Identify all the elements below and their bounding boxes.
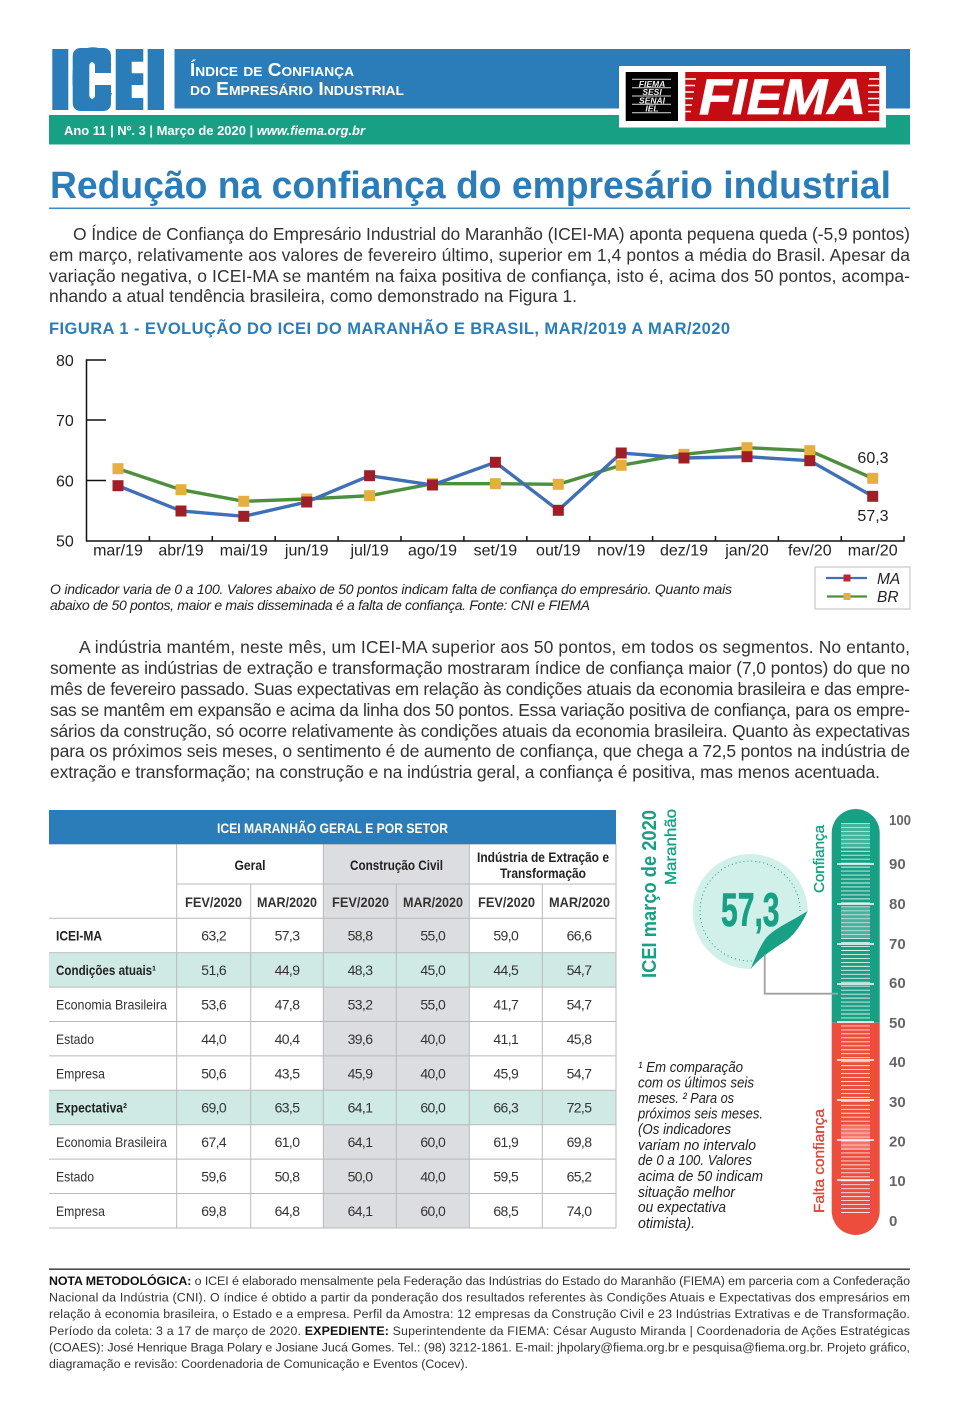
row: ICEI-MA	[56, 928, 592, 944]
logo: ICEI wordmark: I	[141, 30, 169, 129]
chart legend: BR	[877, 589, 899, 606]
figure 1 heading: FIGURA 1 - EVOLUÇÃO DO ICEI DO MARANHÃO E BRASIL, MAR/2019 A MAR/2020	[49, 318, 730, 338]
footnote text: (Os indicadores	[638, 1121, 731, 1138]
x axis labels: fev/20	[788, 542, 832, 560]
row: Estado (expectativa): 59,5	[493, 1168, 519, 1184]
footnote text	[637, 1059, 763, 1232]
footnote text: otimista).	[638, 1215, 695, 1232]
y axis labels	[56, 353, 74, 550]
row: Economia Brasileira (expectativa): 61,0	[275, 1134, 300, 1150]
sector headers: Construção Civil	[350, 857, 443, 873]
table title band	[49, 810, 616, 844]
row: Economia Brasileira (condições): 53,6	[201, 996, 227, 1012]
sticker: value 57,3	[693, 854, 808, 969]
intro paragraph: nhando a atual tendência brasileira, como demonstrado na Figura 1.	[49, 286, 577, 306]
row: Economia Brasileira (expectativa): Economia Brasileira	[56, 1134, 167, 1150]
sector headers: Transformação	[500, 865, 586, 881]
row: ICEI-MA: 66,6	[567, 928, 592, 944]
row: Economia Brasileira (condições): Economia Brasileira	[56, 996, 167, 1012]
footnote text: próximos seis meses.	[637, 1106, 763, 1123]
footnote text: acima de 50 indicam	[638, 1168, 763, 1185]
logo: ICEI wordmark: I	[46, 30, 74, 129]
thermometer labels: 30	[889, 1094, 906, 1111]
logo: ICEI wordmark: C	[70, 30, 114, 130]
thermometer labels	[889, 812, 911, 1230]
sector headers: Geral	[234, 857, 266, 873]
row: Economia Brasileira (expectativa): 67,4	[201, 1134, 227, 1150]
row: Expectativa: 63,5	[275, 1100, 300, 1116]
row: Expectativa: 60,0	[420, 1100, 446, 1116]
line chart: ICEI Maranhão and Brasil	[56, 353, 904, 560]
series: MA	[112, 448, 878, 522]
logo: ICEI wordmark: E	[112, 32, 145, 130]
x axis labels: mar/20	[848, 542, 898, 560]
row: Expectativa: 64,1	[348, 1100, 373, 1116]
vertical subheading: Maranhão: Maranhão	[663, 809, 680, 885]
row: Estado (expectativa)	[56, 1168, 592, 1184]
row: Economia Brasileira (expectativa): 64,1	[348, 1134, 373, 1150]
x axis labels: mai/19	[220, 542, 268, 560]
second paragraph: somente as indústrias de extração e transformação mostraram índice de confiança maior (7,0 pontos) do que no	[50, 658, 910, 678]
row: Expectativa: 72,5	[567, 1100, 592, 1116]
y axis labels: 50	[56, 534, 74, 550]
methodological note and credits: diagramação e revisão: Coordenadoria de Comunicação e Eventos (Cocev).	[49, 1357, 468, 1371]
blue title band	[174, 49, 910, 108]
row: Condições atuais: 44,9	[275, 962, 300, 978]
logo: FIEMA: SENAI	[639, 96, 666, 106]
x axis labels: dez/19	[660, 542, 708, 560]
row: Economia Brasileira (expectativa)	[56, 1134, 592, 1150]
month headers: FEV/2020	[478, 894, 535, 910]
x axis labels: jul/19	[349, 542, 389, 560]
methodological note and credits: (COAES): José Henrique Braga Polary e Josiane Jucá Gomes. Tel.: (98) 3212-1861. E-mail: jhpolary@fiema.org.br e pesquisa@fiema.org.br. Projeto gráfico,	[49, 1340, 910, 1354]
month headers	[185, 894, 610, 910]
footnote text: de 0 a 100. Valores	[638, 1152, 752, 1169]
y axis labels: 70	[56, 413, 74, 430]
row: Empresa (expectativa)	[56, 1203, 592, 1219]
row: Estado (condições): Estado	[56, 1031, 94, 1047]
logo: FIEMA: FIEMA	[699, 69, 866, 125]
row: Estado (expectativa): 40,0	[420, 1168, 446, 1184]
sticker: value 57,3: 57,3	[721, 884, 780, 937]
x axis labels: nov/19	[597, 542, 645, 560]
methodological note and credits: Período da coleta: 3 a 17 de março de 2020. EXPEDIENTE: Superintendente da FIEMA: César Augusto Miranda | Coordenadoria de Ações Estratégicas	[49, 1324, 910, 1338]
row: Empresa (condições): 43,5	[275, 1065, 300, 1081]
row: Empresa (expectativa): 74,0	[567, 1203, 592, 1219]
row: Condições atuais: 54,7	[567, 962, 592, 978]
thermometer scale	[832, 809, 880, 1235]
thermometer labels: 70	[889, 936, 906, 953]
second paragraph: sários da construção, só ocorre relativamente às condições atuais da economia brasileira. Quanto às expectativas	[50, 721, 910, 741]
thermometer labels: 20	[889, 1134, 906, 1150]
sector headers	[234, 849, 609, 881]
row: ICEI-MA: 55,0	[420, 928, 446, 944]
connector from sticker to thermometer	[765, 955, 838, 994]
header masthead	[46, 30, 910, 144]
main title: Redução na confiança do empresário industrial	[50, 165, 891, 207]
methodological note and credits	[49, 1268, 910, 1371]
row: Empresa (expectativa): 64,1	[348, 1203, 373, 1219]
publication name	[190, 59, 404, 99]
row: ICEI-MA: 57,3	[275, 928, 300, 944]
x axis labels: ago/19	[408, 542, 457, 560]
second paragraph: A indústria mantém, neste mês, um ICEI-MA superior aos 50 pontos, em todos os segmentos. No entanto,	[79, 637, 910, 657]
footnote text: situação melhor	[638, 1184, 736, 1201]
footnote text: com os últimos seis	[638, 1074, 754, 1092]
row: Empresa (condições): 45,9	[348, 1065, 373, 1081]
row: Estado (expectativa): 65,2	[567, 1168, 592, 1184]
row: Estado (expectativa): 50,8	[275, 1168, 300, 1184]
vertical heading: ICEI março de 2020: ICEI março de 2020	[639, 810, 661, 978]
row: Estado (expectativa): Estado	[56, 1168, 94, 1184]
x axis labels: set/19	[474, 542, 517, 560]
row: Estado (condições): 39,6	[348, 1031, 373, 1047]
end value labels: 60,3	[857, 450, 889, 467]
row: Estado (expectativa): 50,0	[348, 1168, 373, 1184]
chart caption: abaixo de 50 pontos, maior e mais disseminada é a falta de confiança. Fonte: CNI e FIEMA	[50, 597, 590, 613]
intro paragraph: variação negativa, o ICEI-MA se mantém na faixa positiva de confiança, isto é, acima dos 50 pontos, acompa-	[49, 266, 910, 286]
thermometer labels: 0	[889, 1213, 897, 1230]
logo: FIEMA: IEL	[645, 104, 659, 114]
end value labels: 57,3	[857, 508, 889, 525]
row: Expectativa: 66,3	[493, 1100, 519, 1116]
table title: ICEI MARANHÃO GERAL E POR SETOR	[217, 819, 448, 836]
row: Economia Brasileira (expectativa): 60,0	[420, 1134, 446, 1150]
thermometer labels: 80	[889, 896, 906, 913]
row: Empresa (condições): 54,7	[567, 1065, 592, 1081]
x axis labels	[93, 542, 898, 560]
series: BR	[112, 442, 878, 507]
row: Empresa (expectativa): 69,8	[201, 1203, 227, 1219]
second paragraph: extração e transformação; na construção e na indústria geral, a confiança é positiva, mas menos acentuada.	[50, 762, 880, 782]
thermometer labels: 100	[889, 812, 911, 829]
thermometer labels: 10	[889, 1173, 906, 1190]
month headers: MAR/2020	[549, 894, 610, 910]
end value labels	[857, 450, 889, 525]
row: Expectativa: Expectativa²	[56, 1100, 127, 1116]
y axis labels: 80	[56, 353, 74, 370]
second paragraph: mês de fevereiro passado. Suas expectativas em relação às condições atuais da economia brasileira e das empre-	[50, 679, 910, 699]
row: Empresa (condições)	[56, 1065, 592, 1081]
y axis labels: 60	[56, 474, 74, 490]
footnote text: meses. ² Para os	[638, 1090, 734, 1107]
row: Empresa (expectativa): 60,0	[420, 1203, 446, 1219]
row: ICEI-MA: 59,0	[493, 928, 519, 944]
row: Condições atuais: Condições atuais¹	[56, 962, 156, 978]
row: Empresa (expectativa): 68,5	[493, 1203, 519, 1219]
row: Estado (condições): 40,4	[275, 1031, 300, 1047]
thermometer labels: 60	[889, 975, 906, 992]
row: Condições atuais: 45,0	[420, 962, 446, 978]
month headers: MAR/2020	[257, 894, 317, 910]
row: Estado (condições): 45,8	[567, 1031, 592, 1047]
second paragraph: para os próximos seis meses, o sentimento é de aumento de confiança, que chega a 72,5 pontos na indústria de	[50, 741, 910, 761]
table: ICEI Maranhão geral e por setor	[49, 810, 616, 1228]
row: Estado (condições): 40,0	[420, 1031, 446, 1047]
row: Estado (condições): 44,0	[201, 1031, 227, 1047]
issue information: Ano 11 | Nº. 3 | Março de 2020 | www.fiema.org.br	[64, 123, 366, 138]
logo: FIEMA	[619, 66, 886, 128]
row: Condições atuais: 48,3	[348, 962, 373, 978]
vertical label: Confiança: Confiança	[811, 824, 828, 893]
chart legend: MA	[877, 571, 900, 588]
x axis labels: out/19	[536, 542, 581, 560]
logo: FIEMA: SESI	[642, 87, 662, 97]
thermometer labels: 40	[889, 1054, 906, 1071]
x axis labels: jan/20	[724, 542, 769, 560]
x axis labels: mar/19	[93, 542, 143, 560]
month headers: FEV/2020	[185, 894, 242, 910]
footnote text: variam no intervalo	[638, 1137, 756, 1154]
footnote text: ¹ Em comparação	[638, 1059, 743, 1076]
month headers: MAR/2020	[403, 894, 463, 910]
intro paragraph: em março, relativamente aos valores de fevereiro último, superior em 1,4 pontos a média do Brasil. Apesar da	[49, 245, 910, 265]
intro paragraph	[49, 224, 910, 306]
thermometer labels: 90	[889, 856, 906, 873]
row: Expectativa: 69,0	[201, 1100, 227, 1116]
row: Estado (condições)	[56, 1031, 592, 1047]
row: Economia Brasileira (condições): 55,0	[420, 996, 446, 1012]
row: Economia Brasileira (condições)	[56, 996, 592, 1012]
second paragraph	[50, 637, 910, 782]
sector headers: Indústria de Extração e	[477, 849, 609, 865]
x axis labels: abr/19	[158, 542, 204, 560]
row: Empresa (condições): Empresa	[56, 1065, 105, 1081]
publication name: Índice de Confiança	[190, 59, 355, 80]
x axis labels: jun/19	[284, 542, 329, 560]
row: Economia Brasileira (condições): 54,7	[567, 996, 592, 1012]
row: Condições atuais: 51,6	[201, 962, 227, 978]
row: Empresa (condições): 40,0	[420, 1065, 446, 1081]
thermometer labels: 50	[889, 1015, 906, 1032]
row: Economia Brasileira (expectativa): 69,8	[567, 1134, 592, 1150]
row: Estado (condições): 41,1	[493, 1031, 519, 1047]
row: Empresa (expectativa): Empresa	[56, 1203, 105, 1219]
chart legend	[815, 567, 910, 609]
chart caption	[50, 581, 732, 613]
row: ICEI-MA: 63,2	[201, 928, 227, 944]
second paragraph: sas se mantêm em expansão e acima da linha dos 50 pontos. Essa variação positiva de confiança, para os empre-	[50, 700, 910, 720]
row: Economia Brasileira (condições): 47,8	[275, 996, 300, 1012]
intro paragraph: O Índice de Confiança do Empresário Industrial do Maranhão (ICEI-MA) aponta pequena queda (-5,9 pontos)	[73, 224, 910, 244]
row: Empresa (expectativa): 64,8	[275, 1203, 300, 1219]
row: Estado (expectativa): 59,6	[201, 1168, 227, 1184]
row: Economia Brasileira (expectativa): 61,9	[493, 1134, 519, 1150]
chart caption: O indicador varia de 0 a 100. Valores abaixo de 50 pontos indicam falta de confiança do empresário. Quanto mais	[50, 581, 732, 597]
green issue band	[49, 115, 910, 144]
row: Empresa (condições): 45,9	[493, 1065, 519, 1081]
methodological note and credits: Nacional da Indústria (CNI). O índice é obtido a partir da ponderação dos resultados referentes às Condições Atuais e Expectativas dos empresários em	[49, 1290, 910, 1304]
row: Condições atuais: 44,5	[493, 962, 519, 978]
month headers: FEV/2020	[332, 894, 389, 910]
row: Economia Brasileira (condições): 41,7	[493, 996, 519, 1012]
logo: FIEMA: FIEMA	[639, 79, 665, 89]
row: ICEI-MA: 58,8	[348, 928, 373, 944]
footnote text: ou expectativa	[638, 1199, 726, 1216]
row: ICEI-MA: ICEI-MA	[56, 928, 102, 944]
row: Economia Brasileira (condições): 53,2	[348, 996, 373, 1012]
row: Expectativa	[56, 1100, 592, 1116]
logo: ICEI wordmark	[46, 30, 169, 130]
publication name: do Empresário Industrial	[190, 79, 404, 99]
methodological note and credits: relação à economia brasileira, o Estado e a empresa. Perfil da Amostra: 12 empresas da Construção Civil e 23 Indústrias Extrativas e de Transformação.	[49, 1307, 910, 1321]
row: Condições atuais	[56, 962, 592, 978]
row: Empresa (condições): 50,6	[201, 1065, 227, 1081]
vertical label: Falta confiança: Falta confiança	[811, 1108, 828, 1213]
methodological note and credits: NOTA METODOLÓGICA: o ICEI é elaborado mensalmente pela Federação das Indústrias do Estado do Maranhão (FIEMA) em parceria com a Confederação	[49, 1273, 910, 1288]
